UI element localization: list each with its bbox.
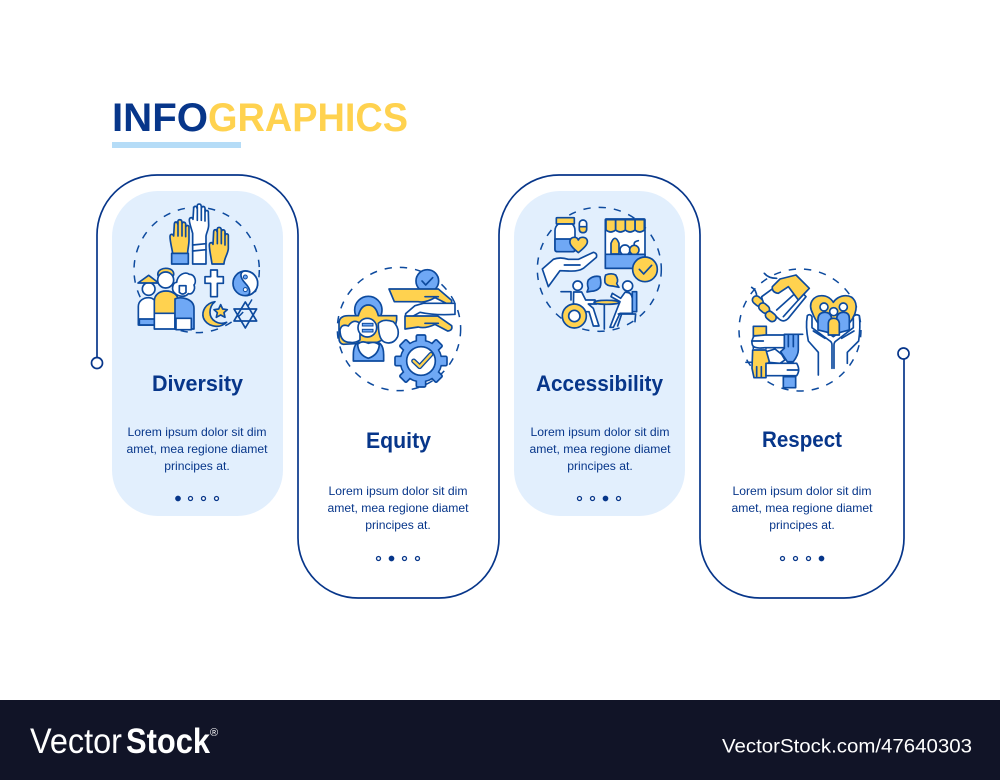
body text: equity: principes at. <box>365 518 431 532</box>
body text: accessibility: principes at. <box>567 459 633 473</box>
body text: respect: amet, mea regione diamet <box>731 501 873 515</box>
winding outline connecting the panels <box>92 175 909 598</box>
panel background: diversity <box>112 191 283 516</box>
heading: diversity: Diversity <box>152 371 244 396</box>
body text: respect: principes at. <box>769 518 835 532</box>
title: GRAPHICS <box>208 96 408 140</box>
footer logo: Vector <box>30 722 122 761</box>
footer url: VectorStock.com/47640303 <box>722 736 972 758</box>
body text: accessibility: Lorem ipsum dolor sit dim <box>530 425 670 439</box>
body text: diversity: principes at. <box>164 459 230 473</box>
body text: diversity: amet, mea regione diamet <box>126 442 268 456</box>
footer bar: Stock <box>126 722 210 761</box>
icon: diversity <box>134 204 259 333</box>
body text: accessibility: amet, mea regione diamet <box>529 442 671 456</box>
pagination dots: diversity <box>176 496 218 501</box>
icon: respect <box>739 269 861 391</box>
title: INFO <box>112 96 208 140</box>
heading: accessibility: Accessibility <box>536 371 664 396</box>
heading: respect: Respect <box>762 427 843 452</box>
footer bar: ® <box>210 727 218 739</box>
title underline <box>112 142 241 148</box>
panel background: accessibility <box>514 191 685 516</box>
footer bar <box>0 700 1000 780</box>
body text: equity: Lorem ipsum dolor sit dim <box>328 484 468 498</box>
body text: respect: Lorem ipsum dolor sit dim <box>732 484 872 498</box>
pagination dots: respect <box>780 556 824 561</box>
heading: equity: Equity <box>366 428 432 453</box>
body text: diversity: Lorem ipsum dolor sit dim <box>128 425 266 439</box>
pagination dots: accessibility <box>578 496 620 501</box>
pagination dots: equity <box>376 556 420 561</box>
body text: equity: amet, mea regione diamet <box>327 501 469 515</box>
title <box>112 96 408 140</box>
icon: accessibility <box>537 207 661 331</box>
icon: equity <box>337 267 461 391</box>
